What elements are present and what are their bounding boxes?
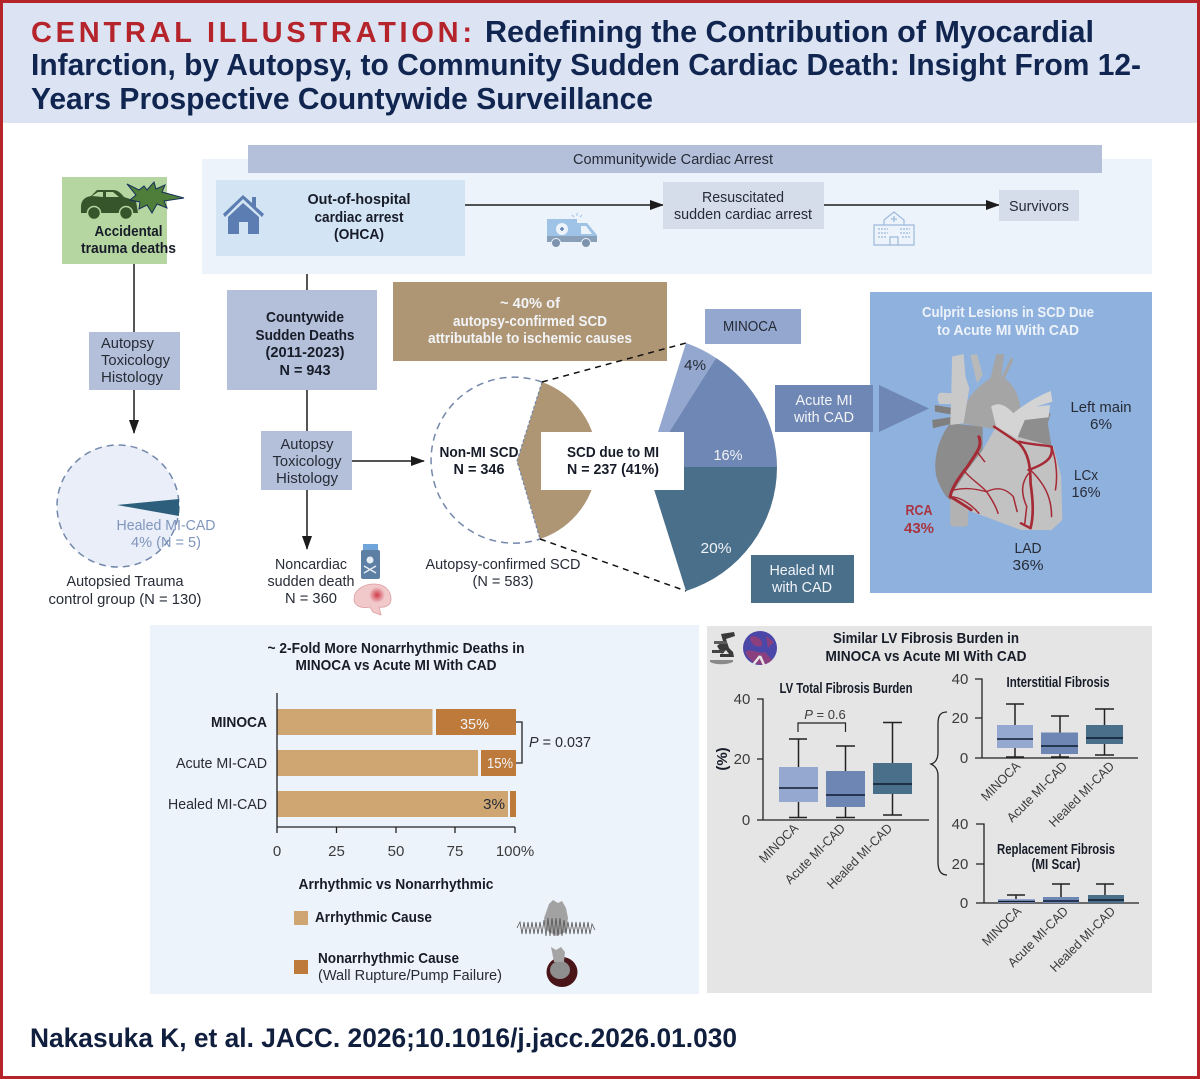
- box: autopsy toxicology histology: Autopsy: [280, 436, 334, 453]
- icon: ambulance: [547, 213, 597, 248]
- box: accidental trauma deaths: [62, 177, 184, 264]
- box: survivors: Survivors: [1009, 198, 1069, 215]
- chart: replacement fibrosis: Acute MI-CAD: [1005, 904, 1071, 970]
- chart: replacement fibrosis: 40: [952, 816, 968, 833]
- chart: stacked bars: 3%: [483, 796, 505, 813]
- chart: stacked bars: 25: [328, 843, 345, 860]
- chart: interstitial fibrosis: 0: [960, 750, 968, 767]
- chart: interstitial fibrosis: 20: [952, 710, 968, 727]
- icon: brain: [354, 584, 391, 615]
- chart: LV total fibrosis burden: LV Total Fibrosis Burden: [780, 680, 912, 697]
- chart: replacement fibrosis: 20: [952, 856, 968, 873]
- icon: hospital: [874, 212, 914, 245]
- icon: microscope: [710, 632, 735, 664]
- arrow: autopsy to noncardiac: [306, 490, 308, 549]
- chart: stacked bars: 0: [273, 843, 281, 860]
- label: autopsy-confirmed SCD: Autopsy-confirmed SCD: [426, 556, 581, 573]
- icon: car crash: [81, 182, 184, 220]
- chart: LV total fibrosis burden: Healed MI-CAD: [824, 821, 895, 892]
- chart: replacement fibrosis: MINOCA: [979, 903, 1024, 949]
- chart: trauma control pie: Healed MI-CAD: [116, 517, 216, 534]
- chart: SCD due to MI exploded pie: [541, 343, 777, 591]
- chart: autopsy-confirmed SCD pie: N = 346: [454, 461, 504, 478]
- box: 40% ischemic causes: attributable to ischemic causes: [428, 330, 632, 347]
- chart: interstitial fibrosis: Interstitial Fibrosis: [1006, 674, 1110, 691]
- box: 40% ischemic causes: autopsy-confirmed SCD: [453, 313, 607, 330]
- chart: LV total fibrosis burden: Acute MI-CAD: [782, 821, 848, 887]
- chart: interstitial fibrosis: Acute MI-CAD: [1004, 759, 1070, 825]
- OHCA box: (OHCA): [334, 226, 384, 243]
- chart: stacked bars: 50: [388, 843, 404, 860]
- chart: stacked bars: Healed MI-CAD: [168, 796, 267, 813]
- chart: LV total fibrosis burden: [714, 680, 929, 892]
- chart: trauma control pie: 4% (N = 5): [131, 534, 201, 551]
- label: healed MI with CAD: with CAD: [771, 579, 832, 596]
- chart: interstitial fibrosis: 40: [952, 671, 968, 688]
- label: MINOCA: MINOCA: [723, 318, 777, 335]
- illustration: heart with coronary arteries: [932, 354, 1062, 530]
- box: countywide sudden deaths: (2011-2023): [266, 344, 344, 361]
- box: resuscitated sudden cardiac arrest: sudden cardiac arrest: [674, 206, 813, 223]
- chart: stacked bars: 100%: [496, 843, 534, 860]
- label: healed MI with CAD: Healed MI: [770, 562, 834, 579]
- box: survivors: [999, 190, 1079, 221]
- label: noncardiac sudden death: sudden death: [268, 573, 354, 590]
- OHCA box: cardiac arrest: [314, 209, 404, 226]
- citation: Nakasuka K, et al. JACC. 2026;10.1016/j.jacc.2026.01.030: [30, 1023, 737, 1053]
- label: LCx: 16%: [1072, 484, 1100, 501]
- panel: culprit lesions: [870, 292, 1152, 593]
- icon: histology slide: [743, 631, 777, 666]
- label: noncardiac sudden death: [268, 556, 354, 607]
- chart: replacement fibrosis: (MI Scar): [1032, 856, 1080, 873]
- label: left main: 6%: [1090, 416, 1112, 433]
- label: MINOCA: [705, 309, 801, 344]
- chart: SCD due to MI exploded pie: SCD due to MI: [567, 444, 659, 461]
- box: resuscitated sudden cardiac arrest: [663, 182, 824, 229]
- icon: arrhythmia heart: [517, 900, 595, 936]
- box: autopsy toxicology histology: Toxicology: [272, 453, 342, 470]
- chart: stacked bars: 75: [447, 843, 463, 860]
- panel: communitywide cardiac arrest: Communitywide Cardiac Arrest: [573, 151, 774, 168]
- arrow: OHCA to resuscitated: [465, 204, 663, 206]
- chart: LV total fibrosis burden: P = 0.6: [804, 707, 846, 722]
- label: trauma control group: [48, 573, 202, 608]
- chart: SCD due to MI exploded pie: 4%: [684, 357, 706, 374]
- panel: LV fibrosis: MINOCA vs Acute MI With CAD: [826, 648, 1027, 665]
- label: left main: Left main: [1070, 399, 1132, 416]
- box: countywide sudden deaths: N = 943: [280, 362, 330, 379]
- chart: stacked bars: [168, 693, 591, 860]
- legend: (Wall Rupture/Pump Failure): [318, 967, 502, 984]
- box: resuscitated sudden cardiac arrest: Resuscitated: [702, 189, 784, 206]
- chart: autopsy-confirmed SCD pie: [431, 377, 597, 543]
- zoom lines: [540, 343, 686, 591]
- label: noncardiac sudden death: N = 360: [285, 590, 337, 607]
- panel: LV fibrosis: [707, 626, 1152, 993]
- label: LCx: LCx: [1074, 467, 1098, 484]
- arrow: autopsy to SCD circle: [352, 460, 424, 462]
- label: RCA: 43%: [904, 520, 934, 537]
- label: acute MI with CAD with arrow: Acute MI: [796, 392, 852, 409]
- chart: stacked bars: Acute MI-CAD: [176, 755, 267, 772]
- box: autopsy toxicology histology: Histology: [276, 470, 338, 487]
- box: trauma autopsy toxicology histology: Autopsy: [101, 335, 154, 352]
- title banner: Years Prospective Countywide Surveillance: [31, 81, 653, 116]
- arrow: trauma to autopsy: [133, 264, 135, 332]
- label: LAD: [1012, 540, 1044, 574]
- label: LAD: 36%: [1012, 557, 1044, 574]
- box: countywide sudden deaths: [227, 290, 377, 390]
- connector: OHCA to countywide: [306, 274, 308, 290]
- panel: nonarrhythmic deaths: MINOCA vs Acute MI With CAD: [296, 657, 497, 674]
- box: accidental trauma deaths: trauma deaths: [81, 240, 176, 257]
- chart: LV total fibrosis burden: 0: [742, 812, 750, 829]
- legend: Arrhythmic vs Nonarrhythmic: [298, 876, 494, 893]
- panel: nonarrhythmic deaths: [150, 625, 699, 994]
- chart: replacement fibrosis: [952, 816, 1139, 975]
- box: trauma autopsy toxicology histology: Toxicology: [101, 352, 170, 369]
- label: acute MI with CAD with arrow: [775, 385, 929, 432]
- chart: SCD due to MI exploded pie: 20%: [700, 540, 732, 557]
- chart: autopsy-confirmed SCD pie: Non-MI SCD: [440, 444, 519, 461]
- legend: [294, 876, 502, 984]
- chart: LV total fibrosis burden: 40: [734, 691, 750, 708]
- label: autopsy-confirmed SCD: [426, 556, 581, 590]
- panel: culprit lesions: to Acute MI With CAD: [937, 322, 1079, 339]
- chart: stacked bars: 15%: [487, 755, 513, 772]
- label: trauma control group: Autopsied Trauma: [66, 573, 184, 590]
- legend: Nonarrhythmic Cause: [318, 950, 459, 967]
- panel: nonarrhythmic deaths: ~ 2-Fold More Nonarrhythmic Deaths in: [268, 640, 524, 657]
- arrow: resuscitated to survivors: [824, 204, 999, 206]
- chart: interstitial fibrosis: [952, 671, 1138, 830]
- chart: trauma control pie: [57, 445, 216, 567]
- chart: stacked bars: 35%: [460, 716, 489, 733]
- panel: culprit lesions: Culprit Lesions in SCD Due: [922, 304, 1094, 321]
- icon: ruptured heart: [546, 947, 578, 987]
- label: trauma control group: control group (N = 130): [48, 591, 202, 608]
- label: healed MI with CAD: [751, 555, 854, 603]
- chart: LV total fibrosis burden: 20: [734, 751, 750, 768]
- brace: [931, 712, 947, 875]
- title banner: [3, 3, 1197, 123]
- label: noncardiac sudden death: Noncardiac: [275, 556, 347, 573]
- icon: poison bottle: [361, 544, 380, 579]
- title banner: Infarction, by Autopsy, to Community Sudden Cardiac Death: Insight From 12-: [31, 47, 1141, 82]
- chart: replacement fibrosis: Healed MI-CAD: [1047, 904, 1118, 975]
- chart: SCD due to MI exploded pie: 16%: [714, 447, 742, 464]
- arrow: autopsy to control group: [133, 390, 135, 433]
- title banner: CENTRAL ILLUSTRATION:: [31, 17, 472, 49]
- chart: LV total fibrosis burden: (%): [714, 747, 731, 771]
- chart: stacked bars: MINOCA: [211, 714, 267, 731]
- label: autopsy-confirmed SCD: (N = 583): [472, 573, 534, 590]
- icon: house: [223, 195, 264, 234]
- chart: SCD due to MI exploded pie: N = 237 (41%): [567, 461, 659, 478]
- panel: communitywide cardiac arrest: [202, 145, 1152, 274]
- label: LAD: LAD: [1014, 540, 1042, 557]
- chart: replacement fibrosis: 0: [960, 895, 968, 912]
- OHCA box: [216, 180, 465, 256]
- label: acute MI with CAD with arrow: with CAD: [793, 409, 854, 426]
- box: autopsy toxicology histology: [261, 431, 352, 490]
- panel: LV fibrosis: Similar LV Fibrosis Burden in: [833, 630, 1019, 647]
- label: RCA: RCA: [906, 502, 933, 519]
- label: LCx: [1072, 467, 1100, 501]
- box: accidental trauma deaths: Accidental: [94, 223, 162, 240]
- box: trauma autopsy toxicology histology: Histology: [101, 369, 163, 386]
- box: 40% ischemic causes: [393, 282, 667, 361]
- chart: stacked bars: P = 0.037: [529, 734, 591, 751]
- chart: interstitial fibrosis: MINOCA: [978, 758, 1023, 804]
- box: 40% ischemic causes: ~ 40% of: [500, 295, 561, 312]
- label: left main: [1070, 399, 1132, 433]
- chart: LV total fibrosis burden: MINOCA: [756, 820, 801, 866]
- title banner: Redefining the Contribution of Myocardial: [485, 14, 1094, 49]
- box: trauma autopsy toxicology histology: [89, 332, 180, 390]
- OHCA box: Out-of-hospital: [308, 191, 410, 208]
- chart: replacement fibrosis: Replacement Fibrosis: [997, 841, 1115, 858]
- box: countywide sudden deaths: Sudden Deaths: [256, 327, 354, 344]
- box: countywide sudden deaths: Countywide: [266, 309, 344, 326]
- chart: interstitial fibrosis: Healed MI-CAD: [1046, 759, 1117, 830]
- connector: countywide to autopsy: [306, 390, 308, 431]
- legend: Arrhythmic Cause: [315, 909, 432, 926]
- label: RCA: [904, 502, 934, 537]
